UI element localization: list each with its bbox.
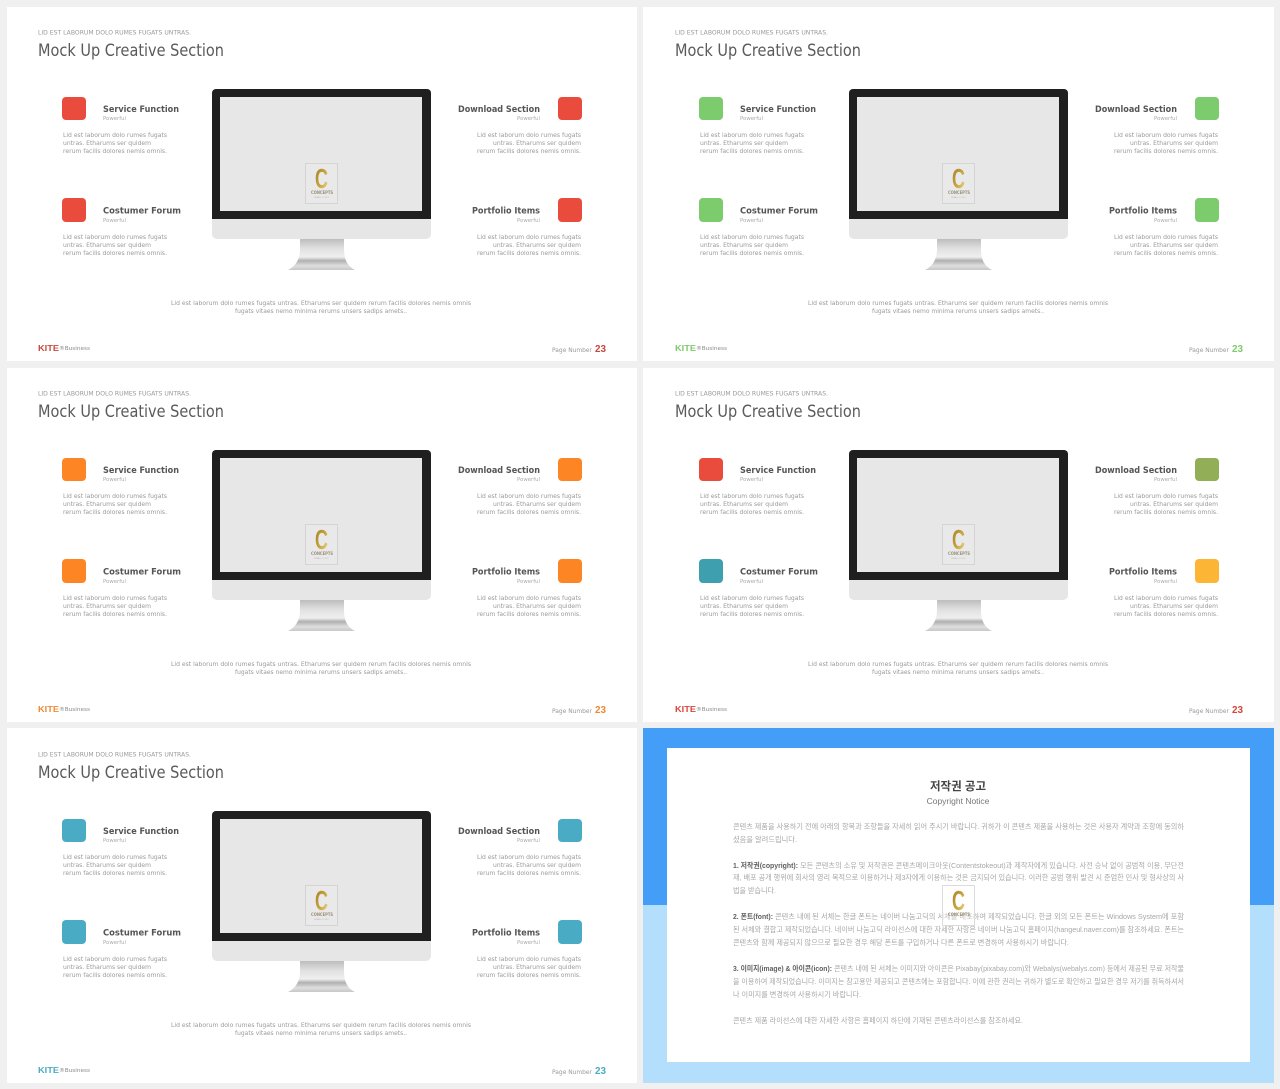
item: costumer forum: rerum facilis dolores nemis omnis. xyxy=(63,612,167,618)
item: download section: untras. Etharums ser quidem xyxy=(1130,502,1218,508)
item: service function: untras. Etharums ser quidem xyxy=(700,141,788,147)
item: costumer forum: untras. Etharums ser quidem xyxy=(700,243,788,249)
item: download section: Powerful xyxy=(1154,116,1177,122)
item: costumer forum xyxy=(699,198,818,257)
page number: 23 xyxy=(595,1066,606,1077)
footer brand: ®Business xyxy=(59,706,90,713)
page number xyxy=(552,1066,606,1077)
page number: Page Number xyxy=(1189,709,1230,715)
panel: copyright notice xyxy=(643,728,1274,1083)
item: costumer forum: untras. Etharums ser quidem xyxy=(63,604,151,610)
footer brand xyxy=(675,704,727,714)
item: portfolio items: Portfolio Items xyxy=(1109,206,1177,216)
item: service function xyxy=(62,458,179,516)
page number xyxy=(552,344,606,355)
page number xyxy=(1189,344,1243,355)
item: costumer forum: untras. Etharums ser quidem xyxy=(63,243,151,249)
item: download section xyxy=(458,458,582,516)
monitor mockup: CONCEPTS xyxy=(311,190,333,195)
caption xyxy=(171,1023,471,1037)
item: portfolio items xyxy=(472,198,582,257)
caption: Lid est laborum dolo rumes fugats untras. Etharums ser quidem rerum facilis dolores nemis omnis xyxy=(171,662,471,668)
footer brand xyxy=(675,343,727,353)
item: download section: Lid est laborum dolo rumes fugats xyxy=(1114,133,1218,139)
item: costumer forum: Costumer Forum xyxy=(103,206,181,216)
item: costumer forum: untras. Etharums ser quidem xyxy=(700,604,788,610)
item: costumer forum: Costumer Forum xyxy=(103,566,181,578)
caption: fugats vitaes nemo minima rerums unsers sadips amets.. xyxy=(235,670,407,676)
monitor mockup xyxy=(849,89,1068,270)
item: costumer forum xyxy=(62,198,181,257)
item: service function: rerum facilis dolores nemis omnis. xyxy=(700,149,804,155)
item: service function: untras. Etharums ser quidem xyxy=(700,502,788,508)
copyright intro xyxy=(733,821,1184,844)
item: portfolio items: rerum facilis dolores nemis omnis. xyxy=(477,251,581,257)
item: portfolio items: rerum facilis dolores nemis omnis. xyxy=(1114,251,1218,257)
monitor mockup xyxy=(212,89,431,270)
monitor mockup: CONCEPTS xyxy=(948,190,970,195)
item: download section: untras. Etharums ser quidem xyxy=(493,502,581,508)
page number: 23 xyxy=(1232,705,1243,716)
title: Mock Up Creative Section xyxy=(38,402,224,421)
item: portfolio items: Portfolio Items xyxy=(1109,566,1177,578)
item: portfolio items: Portfolio Items xyxy=(472,928,540,938)
item: service function xyxy=(62,819,179,877)
item: download section xyxy=(1095,97,1219,155)
copyright clause 1: 법을 받습니다. xyxy=(733,885,776,895)
kicker text: LID EST LABORUM DOLO RUMES FUGATS UNTRAS. xyxy=(38,30,191,36)
copyright heading: 저작권 공고 xyxy=(930,779,986,793)
watermark logo: CONCEPTS xyxy=(948,912,970,917)
footer brand: ®Business xyxy=(59,1067,90,1074)
item: service function xyxy=(62,97,179,155)
monitor mockup: SMALL LOGO xyxy=(314,557,329,560)
footer brand: KITE xyxy=(38,1065,59,1075)
kicker text: LID EST LABORUM DOLO RUMES FUGATS UNTRAS. xyxy=(38,392,191,398)
item: costumer forum xyxy=(62,559,181,618)
item: costumer forum: Lid est laborum dolo rumes fugats xyxy=(63,957,167,963)
item: download section: Download Section xyxy=(458,826,540,837)
item: portfolio items: Portfolio Items xyxy=(472,206,540,216)
copyright clause 1: 모든 콘텐츠의 소유 및 저작권은 콘텐츠메이크아웃(Contentstokeout)과 제작자에게 있습니다. 사전 승낙 없이 공범적 이용, 무단전 xyxy=(800,860,1184,870)
item: portfolio items: Lid est laborum dolo rumes fugats xyxy=(477,235,581,241)
item: download section: Download Section xyxy=(458,104,540,115)
item: download section: Lid est laborum dolo rumes fugats xyxy=(477,855,581,861)
title: Mock Up Creative Section xyxy=(38,41,224,60)
item: download section: Download Section xyxy=(458,465,540,476)
item: service function: untras. Etharums ser quidem xyxy=(63,863,151,869)
item: download section: rerum facilis dolores nemis omnis. xyxy=(1114,149,1218,155)
kicker text: LID EST LABORUM DOLO RUMES FUGATS UNTRAS. xyxy=(675,392,828,398)
footer brand: KITE xyxy=(675,704,696,714)
copyright clause 3: 을 이용하여 제작되었습니다. 이미지는 참고용만 제공되고 콘텐츠에는 포함합니다. 이에 관한 권리는 귀하가 별도로 확인하고 필요한 경우 저기를 취득하셔서 xyxy=(733,976,1184,986)
monitor mockup: C xyxy=(315,885,328,916)
caption: fugats vitaes nemo minima rerums unsers sadips amets.. xyxy=(235,1031,407,1037)
item: costumer forum: Powerful xyxy=(103,579,126,585)
item: download section: Lid est laborum dolo rumes fugats xyxy=(1114,494,1218,500)
item: costumer forum: Powerful xyxy=(740,579,763,585)
item: costumer forum: Costumer Forum xyxy=(740,206,818,216)
item: service function xyxy=(699,97,816,155)
page number: Page Number xyxy=(1189,348,1230,354)
page number: 23 xyxy=(595,344,606,355)
item: download section: Powerful xyxy=(517,838,540,844)
item: service function: rerum facilis dolores nemis omnis. xyxy=(63,149,167,155)
footer brand: KITE xyxy=(675,343,696,353)
item: download section: untras. Etharums ser quidem xyxy=(493,863,581,869)
copyright intro: 콘텐츠 제품을 사용하기 전에 아래의 항목과 조항들을 자세히 읽어 주시기 바랍니다. 귀하가 이 콘텐츠 제품을 사용하는 것은 사용자 계약과 조항에 동의하 xyxy=(733,821,1184,831)
item: costumer forum xyxy=(699,559,818,618)
monitor mockup: C xyxy=(315,524,328,555)
item: service function: Lid est laborum dolo rumes fugats xyxy=(700,133,804,139)
item: portfolio items: Portfolio Items xyxy=(472,566,540,578)
item: portfolio items: Powerful xyxy=(517,940,540,946)
footer brand xyxy=(38,704,90,714)
item: costumer forum: untras. Etharums ser quidem xyxy=(63,965,151,971)
item: costumer forum: Powerful xyxy=(103,940,126,946)
caption: Lid est laborum dolo rumes fugats untras. Etharums ser quidem rerum facilis dolores nemis omnis xyxy=(171,301,471,307)
monitor mockup: CONCEPTS xyxy=(311,912,333,917)
panel: slide 3 orange xyxy=(7,368,637,722)
copyright clause 2: 2. 폰트(font): xyxy=(733,912,773,921)
copyright intro: 셨음을 알려드립니다. xyxy=(733,834,797,844)
title: Mock Up Creative Section xyxy=(675,41,861,60)
kicker text: LID EST LABORUM DOLO RUMES FUGATS UNTRAS. xyxy=(38,752,191,758)
footer brand: KITE xyxy=(38,704,59,714)
caption xyxy=(808,662,1108,676)
item: service function: rerum facilis dolores nemis omnis. xyxy=(700,510,804,516)
item: costumer forum xyxy=(62,920,181,979)
watermark logo xyxy=(942,885,974,926)
copyright clause 2: 된 서체와 결합고 제작되었습니다. 네이버 나눔고딕 라이선스에 대한 자세한 사항은 네이버 나눔고딕 홈페이지(hangeul.naver.com)를 참조하세요. 폰트는 xyxy=(733,924,1184,934)
item: service function: Lid est laborum dolo rumes fugats xyxy=(63,133,167,139)
item: costumer forum: rerum facilis dolores nemis omnis. xyxy=(63,251,167,257)
item: portfolio items: Powerful xyxy=(517,579,540,585)
item: service function: Lid est laborum dolo rumes fugats xyxy=(63,494,167,500)
item: download section: Lid est laborum dolo rumes fugats xyxy=(477,133,581,139)
item: portfolio items xyxy=(1109,559,1219,618)
item: costumer forum: Lid est laborum dolo rumes fugats xyxy=(63,235,167,241)
item: portfolio items: Lid est laborum dolo rumes fugats xyxy=(477,957,581,963)
monitor mockup: SMALL LOGO xyxy=(314,918,329,921)
page number: 23 xyxy=(595,705,606,716)
item: portfolio items: rerum facilis dolores nemis omnis. xyxy=(477,973,581,979)
watermark logo: C xyxy=(952,885,965,916)
copyright closing note: 콘텐츠 제품 라이선스에 대한 자세한 사항은 홈페이지 하단에 기재된 콘텐츠라이선스를 참조하세요. xyxy=(733,1015,1023,1025)
item: service function: Service Function xyxy=(103,465,179,476)
page number xyxy=(1189,705,1243,716)
item: download section: Lid est laborum dolo rumes fugats xyxy=(477,494,581,500)
item: portfolio items: untras. Etharums ser quidem xyxy=(1130,243,1218,249)
item: service function: Service Function xyxy=(103,104,179,115)
page number: Page Number xyxy=(552,1070,593,1076)
monitor mockup xyxy=(849,450,1068,631)
item: costumer forum: rerum facilis dolores nemis omnis. xyxy=(700,251,804,257)
title: Mock Up Creative Section xyxy=(675,402,861,421)
copyright heading: Copyright Notice xyxy=(927,796,990,806)
monitor mockup: C xyxy=(952,163,965,194)
item: service function: Powerful xyxy=(740,477,763,483)
copyright clause 3 xyxy=(733,963,1184,999)
monitor mockup: SMALL LOGO xyxy=(951,557,966,560)
item: download section: Download Section xyxy=(1095,465,1177,476)
item: costumer forum: Lid est laborum dolo rumes fugats xyxy=(700,235,804,241)
item: portfolio items: Lid est laborum dolo rumes fugats xyxy=(1114,596,1218,602)
copyright clause 3: 3. 이미지(image) & 아이콘(icon): xyxy=(733,963,832,973)
item: service function: Powerful xyxy=(103,477,126,483)
page number: 23 xyxy=(1232,344,1243,355)
item: portfolio items: Lid est laborum dolo rumes fugats xyxy=(477,596,581,602)
item: portfolio items: Powerful xyxy=(517,218,540,224)
panel: slide 4 multicolor xyxy=(643,368,1274,722)
item: portfolio items: untras. Etharums ser quidem xyxy=(1130,604,1218,610)
monitor mockup xyxy=(212,450,431,631)
caption: Lid est laborum dolo rumes fugats untras. Etharums ser quidem rerum facilis dolores nemis omnis xyxy=(808,301,1108,307)
item: service function: Service Function xyxy=(740,104,816,115)
item: portfolio items: untras. Etharums ser quidem xyxy=(493,604,581,610)
item: portfolio items xyxy=(1109,198,1219,257)
item: costumer forum: Powerful xyxy=(740,218,763,224)
caption: Lid est laborum dolo rumes fugats untras. Etharums ser quidem rerum facilis dolores nemis omnis xyxy=(808,662,1108,668)
item: download section: Powerful xyxy=(517,477,540,483)
kicker text: LID EST LABORUM DOLO RUMES FUGATS UNTRAS. xyxy=(675,30,828,36)
item: service function: Service Function xyxy=(103,826,179,837)
item: service function: untras. Etharums ser quidem xyxy=(63,141,151,147)
item: costumer forum: Lid est laborum dolo rumes fugats xyxy=(700,596,804,602)
item: download section: rerum facilis dolores nemis omnis. xyxy=(477,871,581,877)
footer brand: ®Business xyxy=(59,345,90,352)
item: portfolio items xyxy=(472,559,582,618)
item: download section xyxy=(458,97,582,155)
item: portfolio items: rerum facilis dolores nemis omnis. xyxy=(477,612,581,618)
copyright clause 3: 나 이미지를 변경하여 사용하시기 바랍니다. xyxy=(733,989,861,999)
copyright clause 1: 재, 배포 공개 행위에 회사의 영리 목적으로 이용하거나 제3자에게 이용하는 것은 금지되어 있습니다. 이러한 공범 행위 발견 시 준엄한 민사 및 형사상의 사 xyxy=(733,872,1184,882)
item: portfolio items: untras. Etharums ser quidem xyxy=(493,965,581,971)
item: download section xyxy=(1095,458,1219,516)
caption xyxy=(171,662,471,676)
item: service function: rerum facilis dolores nemis omnis. xyxy=(63,871,167,877)
item: portfolio items xyxy=(472,920,582,979)
item: portfolio items: Lid est laborum dolo rumes fugats xyxy=(1114,235,1218,241)
copyright clause 3: 콘텐츠 내에 된 서체는 이미지와 아이콘은 Pixabay(pixabay.com)와 Webalys(webalys.com) 등에서 제공된 무료 저작물 xyxy=(834,963,1184,973)
caption: fugats vitaes nemo minima rerums unsers sadips amets.. xyxy=(872,670,1044,676)
item: costumer forum: Costumer Forum xyxy=(740,566,818,578)
item: service function xyxy=(699,458,816,516)
item: download section: rerum facilis dolores nemis omnis. xyxy=(1114,510,1218,516)
item: download section: untras. Etharums ser quidem xyxy=(1130,141,1218,147)
footer brand xyxy=(38,1065,90,1075)
caption: fugats vitaes nemo minima rerums unsers sadips amets.. xyxy=(872,309,1044,315)
item: service function: Powerful xyxy=(103,116,126,122)
item: download section: Powerful xyxy=(517,116,540,122)
footer brand: KITE xyxy=(38,343,59,353)
caption xyxy=(808,301,1108,315)
panel: slide 5 teal xyxy=(7,728,637,1083)
monitor mockup: CONCEPTS xyxy=(948,551,970,556)
footer brand: ®Business xyxy=(696,706,727,713)
page number: Page Number xyxy=(552,709,593,715)
copyright heading xyxy=(927,779,990,806)
panel: slide 2 green xyxy=(643,7,1274,361)
item: service function: Powerful xyxy=(740,116,763,122)
monitor mockup: SMALL LOGO xyxy=(314,196,329,199)
item: download section xyxy=(458,819,582,877)
caption xyxy=(171,301,471,315)
monitor mockup: CONCEPTS xyxy=(311,551,333,556)
footer brand xyxy=(38,343,90,353)
item: portfolio items: Powerful xyxy=(1154,579,1177,585)
item: download section: rerum facilis dolores nemis omnis. xyxy=(477,510,581,516)
caption: Lid est laborum dolo rumes fugats untras. Etharums ser quidem rerum facilis dolores nemis omnis xyxy=(171,1023,471,1029)
item: costumer forum: rerum facilis dolores nemis omnis. xyxy=(700,612,804,618)
page number xyxy=(552,705,606,716)
item: service function: Service Function xyxy=(740,465,816,476)
item: download section: Powerful xyxy=(1154,477,1177,483)
item: costumer forum: Powerful xyxy=(103,218,126,224)
footer brand: ®Business xyxy=(696,345,727,352)
item: portfolio items: rerum facilis dolores nemis omnis. xyxy=(1114,612,1218,618)
item: portfolio items: untras. Etharums ser quidem xyxy=(493,243,581,249)
item: costumer forum: Lid est laborum dolo rumes fugats xyxy=(63,596,167,602)
item: download section: rerum facilis dolores nemis omnis. xyxy=(477,149,581,155)
item: service function: untras. Etharums ser quidem xyxy=(63,502,151,508)
caption: fugats vitaes nemo minima rerums unsers sadips amets.. xyxy=(235,309,407,315)
item: costumer forum: Costumer Forum xyxy=(103,928,181,938)
monitor mockup: SMALL LOGO xyxy=(951,196,966,199)
item: download section: Download Section xyxy=(1095,104,1177,115)
item: service function: Lid est laborum dolo rumes fugats xyxy=(700,494,804,500)
copyright clause 2: 콘텐츠와 함께 제공되지 않으므로 필요한 경우 해당 폰트를 구입하거나 다른 폰트로 변경하여 사용하시기 바랍니다. xyxy=(733,937,1069,947)
item: download section: untras. Etharums ser quidem xyxy=(493,141,581,147)
copyright clause 2 xyxy=(733,911,1184,947)
item: service function: Powerful xyxy=(103,838,126,844)
item: service function: Lid est laborum dolo rumes fugats xyxy=(63,855,167,861)
item: service function: rerum facilis dolores nemis omnis. xyxy=(63,510,167,516)
item: costumer forum: rerum facilis dolores nemis omnis. xyxy=(63,973,167,979)
page number: Page Number xyxy=(552,348,593,354)
monitor mockup xyxy=(212,811,431,992)
copyright clause 2: 콘텐츠 내에 된 서체는 한글 폰트는 네이버 나눔고딕의 서체를 배포하여 제작되었습니다. 한글 외의 모든 폰트는 Windows System에 포함 xyxy=(775,911,1184,921)
item: portfolio items: Powerful xyxy=(1154,218,1177,224)
monitor mockup: C xyxy=(952,524,965,555)
copyright clause 1: 1. 저작권(copyright): xyxy=(733,860,798,870)
monitor mockup: C xyxy=(315,163,328,194)
copyright clause 1 xyxy=(733,860,1184,895)
panel: slide 1 red xyxy=(7,7,637,361)
title: Mock Up Creative Section xyxy=(38,763,224,782)
